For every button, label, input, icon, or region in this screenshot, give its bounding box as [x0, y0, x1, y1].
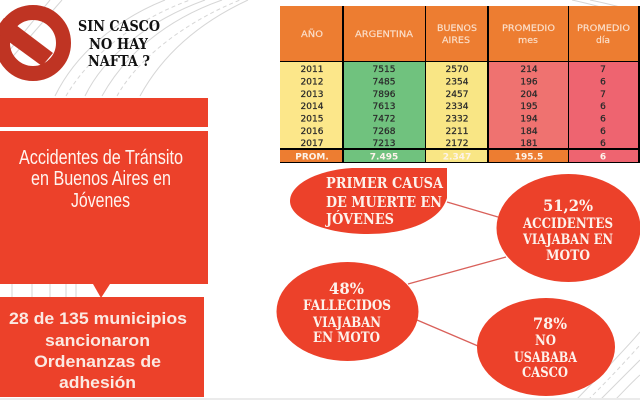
table header: PROMEDIO: [502, 24, 555, 34]
table header: BUENOS: [437, 24, 477, 34]
red bar: [0, 98, 208, 127]
bubble: 48%: [276, 262, 418, 361]
table rows: 195: [520, 102, 538, 112]
table header: mes: [518, 36, 538, 46]
table rows: 2016: [301, 127, 324, 137]
table rows: 6: [600, 139, 606, 149]
table rows: 6: [600, 102, 606, 112]
title: accidentes de tránsito en jóvenes: Jóvenes: [71, 190, 130, 212]
text: 28 de 135 municipios: 28 de 135 municipios: [9, 309, 187, 328]
title: accidentes de tránsito en jóvenes: en Buenos Aires en: [31, 168, 171, 190]
text: 28 de 135 municipios: sancionaron: [45, 331, 150, 350]
table rows: 7268: [373, 127, 396, 137]
table rows: 2012: [301, 78, 323, 88]
bubble: 78%: USABABA: [514, 350, 577, 366]
heading: sin casco no hay nafta: [78, 17, 160, 70]
table average row: PROM.: [295, 152, 329, 162]
icon: prohibition sign: [0, 12, 64, 74]
table header: día: [596, 36, 610, 46]
bubble: primer causa: PRIMER CAUSA: [326, 174, 443, 192]
table body cells: [280, 62, 638, 148]
bubble: primer causa: JÓVENES: [324, 210, 394, 228]
table average row: 7.495: [370, 152, 398, 162]
heading: sin casco no hay nafta: NAFTA ?: [88, 52, 150, 70]
table rows: 6: [600, 127, 606, 137]
connector lines: [408, 202, 506, 346]
bubble: 48%: EN MOTO: [313, 330, 380, 346]
bubble: 48%: 48%: [329, 279, 364, 298]
panel: accidentes de tránsito: [0, 131, 208, 284]
table rows: 214: [520, 65, 538, 75]
bubble: 78%: 78%: [533, 314, 567, 333]
arrow pointer: [93, 284, 110, 298]
table rows: 2013: [301, 90, 323, 100]
table average row: 195.5: [515, 152, 543, 162]
table rows: 7: [600, 65, 606, 75]
table average row: 2.347: [443, 152, 471, 162]
bubble: primer causa: [290, 168, 447, 234]
bubble: 51,2%: ACCIDENTES: [522, 216, 613, 232]
bubble: primer causa: DE MUERTE EN: [326, 193, 442, 211]
bubble: 78%: CASCO: [522, 365, 568, 381]
table rows: 2172: [446, 139, 468, 149]
table rows: 7472: [373, 114, 395, 124]
title: accidentes de tránsito en jóvenes: [19, 147, 183, 212]
table rows: [301, 65, 606, 149]
table rows: 2457: [446, 90, 468, 100]
bubble: 51,2%: VIAJABAN EN: [522, 232, 613, 248]
text: 28 de 135 municipios: Ordenanzas de: [34, 352, 161, 371]
table header: PROMEDIO: [577, 24, 630, 34]
bubble: 51,2%: 51,2%: [543, 196, 593, 215]
heading: sin casco no hay nafta: SIN CASCO: [78, 17, 160, 35]
table header: AÑO: [301, 29, 323, 40]
text: 28 de 135 municipios: adhesión: [59, 373, 136, 392]
table header: ARGENTINA: [355, 30, 414, 40]
text: 28 de 135 municipios: [9, 309, 187, 392]
table rows: 204: [520, 90, 538, 100]
table rows: 2570: [446, 65, 469, 75]
table rows: 7485: [373, 78, 395, 88]
bubble: 78%: NO: [535, 333, 556, 349]
title: accidentes de tránsito en jóvenes: Accidentes de Tránsito: [19, 147, 183, 169]
table rows: 196: [520, 78, 538, 88]
table rows: 2334: [446, 102, 469, 112]
table rows: 2011: [301, 65, 323, 75]
table header: [280, 6, 638, 61]
table rows: 194: [520, 114, 538, 124]
table average row: [280, 150, 638, 162]
table rows: 7213: [373, 139, 395, 149]
table rows: 7515: [373, 65, 395, 75]
table rows: 6: [600, 114, 606, 124]
bubble: 48%: FALLECIDOS: [303, 298, 391, 314]
bubble: 51,2%: MOTO: [546, 248, 590, 264]
table rows: 184: [520, 127, 538, 137]
table rows: 2332: [446, 114, 468, 124]
table rows: 2354: [446, 78, 469, 88]
table average row: 6: [600, 152, 606, 162]
table rows: 2014: [301, 102, 324, 112]
bubble: 78%: [477, 298, 615, 396]
table rows: 2017: [301, 139, 323, 149]
heading: sin casco no hay nafta: NO HAY: [89, 35, 148, 53]
table rows: 181: [520, 139, 538, 149]
table header: AIRES: [442, 36, 470, 46]
table rows: 7613: [373, 102, 395, 112]
table rows: 7896: [373, 90, 396, 100]
table rows: 2015: [301, 114, 323, 124]
panel: municipios: [0, 297, 204, 397]
table rows: 2211: [446, 127, 468, 137]
bubble: 48%: VIAJABAN: [312, 315, 381, 331]
table: accidents by year: [280, 6, 640, 163]
bubble: 51,2%: [496, 174, 640, 282]
table rows: 6: [600, 78, 606, 88]
table rows: 7: [600, 90, 606, 100]
